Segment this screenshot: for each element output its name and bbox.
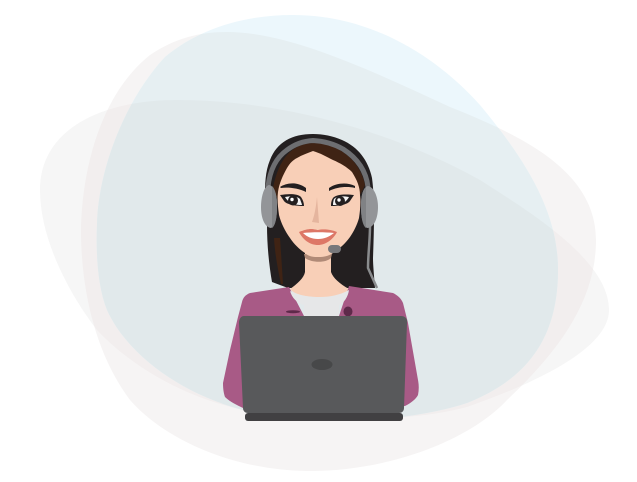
hair — [265, 134, 375, 288]
jacket — [223, 286, 419, 408]
neck — [290, 250, 349, 297]
button — [344, 306, 352, 316]
right ear cup — [361, 186, 378, 228]
mouth — [299, 229, 337, 245]
headset — [261, 140, 378, 288]
shirt — [290, 290, 349, 317]
pocket — [286, 310, 300, 313]
eyebrows — [280, 183, 355, 192]
laptop logo — [312, 359, 332, 370]
microphone — [340, 224, 362, 249]
hair highlights — [273, 143, 365, 200]
laptop — [239, 316, 407, 421]
nose — [312, 197, 319, 223]
left ear cup — [261, 185, 277, 228]
eyes — [280, 194, 354, 206]
laptop base — [245, 413, 403, 421]
face — [278, 151, 360, 257]
neck shadow — [304, 254, 332, 262]
